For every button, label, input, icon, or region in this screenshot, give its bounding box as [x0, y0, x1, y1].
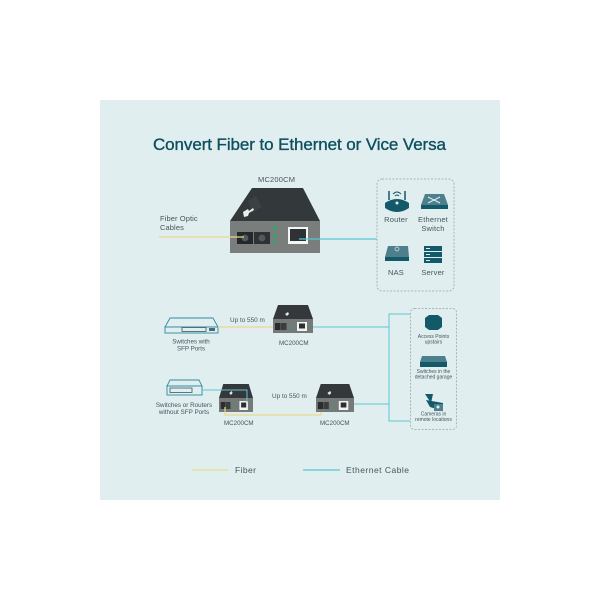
label: access points: upstairs — [425, 340, 443, 346]
icon: access point — [425, 315, 442, 330]
device: lower right converter — [316, 384, 354, 412]
icon: switch with SFP ports — [165, 318, 218, 333]
label: NAS: NAS — [388, 268, 404, 277]
legend: fiber: Fiber — [235, 465, 256, 475]
device: upper converter — [273, 305, 313, 333]
icon: server — [424, 246, 442, 263]
label: access points — [418, 334, 450, 346]
label: switches or routers without SFP: without SFP Ports — [158, 409, 209, 416]
ethernet line: upper converter — [313, 326, 389, 328]
panel: remote devices — [410, 308, 456, 430]
label: router: Router — [384, 215, 408, 224]
ethernet line: switch to converter — [202, 390, 247, 402]
fiber line: lower link — [225, 407, 321, 415]
label: switches with SFP ports: Switches with — [172, 338, 210, 346]
icon: ethernet switch — [421, 194, 448, 209]
label: switches or routers without SFP: Switches or Routers — [156, 402, 212, 409]
device: lower left converter — [219, 384, 253, 412]
label: ethernet switch — [418, 215, 449, 233]
label: fiber optic cables: Fiber Optic — [160, 214, 198, 223]
label: switches with SFP ports — [172, 338, 210, 352]
label: switches or routers without SFP — [156, 402, 212, 416]
ethernet line: lower converter — [354, 403, 389, 405]
icon: NAS — [385, 246, 409, 261]
label: ethernet switch: Ethernet — [418, 215, 449, 224]
label: cameras: remote locations — [415, 417, 452, 423]
icon: camera — [425, 394, 443, 411]
label: upper converter name: MC200CM — [279, 340, 309, 347]
label: garage switches: detached garage — [415, 374, 452, 380]
fiber line: main — [159, 236, 244, 238]
ethernet line: main — [299, 238, 377, 240]
label: switches with SFP ports: SFP Ports — [177, 346, 205, 352]
icon: switch without SFP — [167, 380, 202, 395]
label: lower right converter name: MC200CM — [320, 420, 350, 427]
label: lower left converter name: MC200CM — [224, 420, 254, 427]
label: fiber optic cables: Cables — [160, 223, 184, 232]
label: garage switches: Switches in the — [417, 369, 451, 375]
background panel — [100, 100, 500, 500]
label: ethernet switch: Switch — [421, 224, 445, 233]
title: Convert Fiber to Ethernet or Vice Versa — [153, 135, 447, 154]
label: fiber optic cables — [160, 214, 198, 232]
icon: garage switch — [420, 356, 447, 367]
label: garage switches — [415, 369, 452, 380]
label: up to 550 m lower: Up to 550 m — [272, 393, 307, 400]
fiber line: upper link — [218, 326, 281, 328]
label: main device name: MC200CM — [258, 175, 295, 184]
label: up to 550 m upper: Up to 550 m — [230, 317, 265, 324]
icon: router — [385, 191, 409, 212]
ethernet bus — [389, 314, 410, 421]
label: cameras — [415, 412, 452, 423]
label: cameras: Cameras in — [421, 412, 446, 418]
label: server: Server — [421, 268, 445, 277]
panel: wired devices — [377, 179, 454, 291]
legend: ethernet cable: Ethernet Cable — [346, 465, 409, 475]
label: access points: Access Points — [418, 334, 450, 340]
main device: MC200CM — [230, 188, 320, 253]
legend: fiber — [192, 465, 256, 475]
legend: ethernet cable — [303, 465, 409, 475]
